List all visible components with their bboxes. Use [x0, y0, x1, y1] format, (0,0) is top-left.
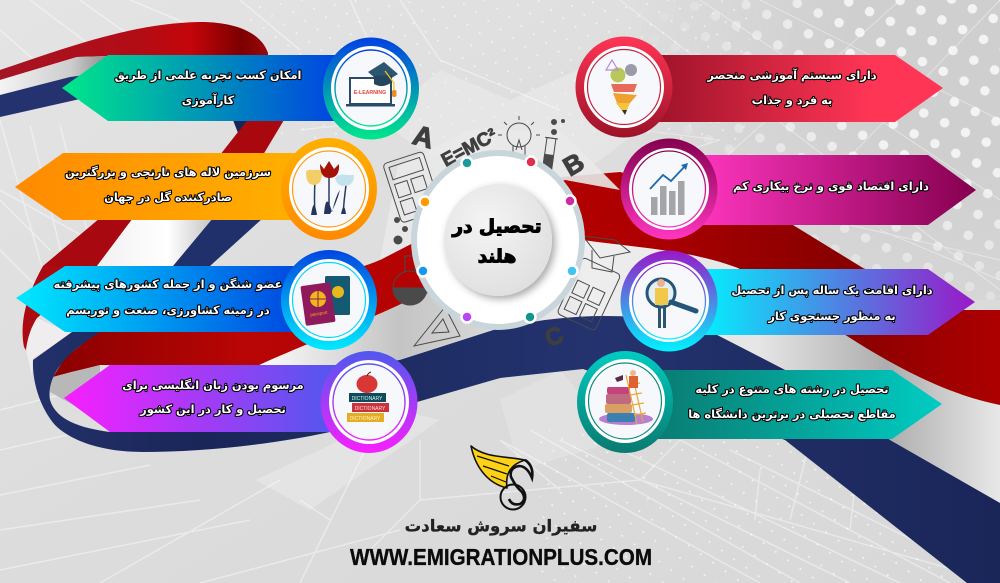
icon: winged S — [471, 446, 532, 510]
doodle: calculator left — [383, 151, 442, 223]
text block: مقاطع تحصیلی در برترین دانشگاه ها — [688, 407, 896, 421]
ribbon: front red, white and navy bands — [33, 172, 1000, 583]
doodle: letter C: C — [542, 321, 567, 353]
text block: عضو شنگن و از جمله کشورهای پیشرفته — [54, 277, 282, 291]
icon: dictionaries: DICTIONARY — [355, 406, 386, 412]
text block — [122, 378, 304, 416]
panel: strong economy — [620, 138, 976, 240]
arrow bar — [64, 365, 340, 432]
doodle: flask — [393, 256, 427, 305]
arrow bar — [695, 269, 975, 335]
text block — [65, 165, 271, 204]
panel: unique education system — [576, 36, 943, 138]
text block: در زمینه کشاورزی، صنعت و توریسم — [66, 303, 270, 317]
icon: dictionaries: DICTIONARY — [350, 416, 381, 422]
text block: تحصیل و کار در این کشور — [139, 402, 286, 416]
doodle: light bulb — [498, 116, 540, 155]
text block — [706, 68, 877, 107]
doodle: letter B: B — [558, 147, 589, 182]
doodle: graduation cap — [583, 236, 630, 272]
text block: صادرکننده گل در جهان — [104, 190, 232, 204]
hub title — [451, 216, 542, 268]
text block: دارای اقامت یک ساله پس از تحصیل — [731, 283, 933, 297]
logo: brand mark and name — [350, 446, 652, 570]
panel: english language — [64, 351, 418, 453]
panel: tulips — [15, 138, 377, 240]
text block: کارآموزی — [182, 93, 235, 107]
doodle: dots — [394, 119, 565, 244]
doodle: letter A: A — [410, 119, 437, 154]
icon: passports — [281, 250, 377, 350]
doodle: formula E=MC2: E=MC² — [438, 125, 501, 171]
icon: job search magnifier — [620, 250, 718, 352]
text block — [115, 68, 301, 107]
centre doodles — [380, 116, 630, 353]
text block: دارای سیستم آموزشی منحصر — [706, 68, 877, 82]
doodle: test tube — [541, 137, 558, 171]
text block: دارای اقتصاد قوی و نرخ بیکاری کم — [733, 179, 929, 193]
arrow bar — [695, 155, 976, 225]
text block — [54, 277, 282, 317]
icon: education pencil — [576, 36, 672, 138]
icon: e-learning laptop — [323, 38, 419, 140]
hub title: هلند — [478, 246, 516, 268]
arrow bar — [15, 153, 300, 220]
icon: dictionaries — [320, 351, 418, 453]
panel: practical experience — [62, 38, 419, 140]
central hub — [414, 153, 582, 327]
icon: passports: passport — [310, 310, 328, 317]
icon: tulips — [281, 138, 377, 240]
hub title: تحصیل در — [451, 216, 542, 238]
panel: residency — [620, 250, 975, 352]
arrow bar — [650, 55, 943, 122]
hub inner disc — [444, 184, 552, 296]
panel: diverse fields — [577, 351, 942, 453]
arrow bar — [16, 266, 300, 332]
text block: به منظور جستجوی کار — [767, 309, 896, 323]
text block: مرسوم بودن زبان انگلیسی برای — [122, 378, 304, 392]
panel: schengen member — [16, 250, 377, 350]
text block: به فرد و جذاب — [752, 93, 832, 107]
arrow bar — [650, 370, 942, 439]
hub connector dots — [418, 156, 578, 322]
icon: stacked books — [577, 351, 673, 453]
text block — [688, 382, 896, 421]
text block: امکان کسب تجربه علمی از طریق — [115, 68, 301, 82]
text block: تحصیل در رشته های متنوع در کلیه — [695, 382, 889, 396]
doodle: calculator right — [557, 257, 621, 331]
hub outer ring — [414, 153, 582, 327]
arrow bar — [62, 55, 345, 121]
text block: سرزمین لاله های نارنجی و بزرگترین — [65, 165, 271, 179]
text block — [731, 283, 933, 323]
ribbon: back strand from top-left — [0, 22, 284, 376]
icon: dictionaries: DICTIONARY — [352, 396, 383, 402]
icon: bar chart — [620, 138, 718, 240]
website url: WWW.EMIGRATIONPLUS.COM — [350, 544, 652, 570]
brand name: سفیران سروش سعادت — [405, 516, 597, 536]
icon: e-learning laptop: E-LEARNING — [354, 90, 386, 96]
doodle: set square — [414, 307, 460, 346]
